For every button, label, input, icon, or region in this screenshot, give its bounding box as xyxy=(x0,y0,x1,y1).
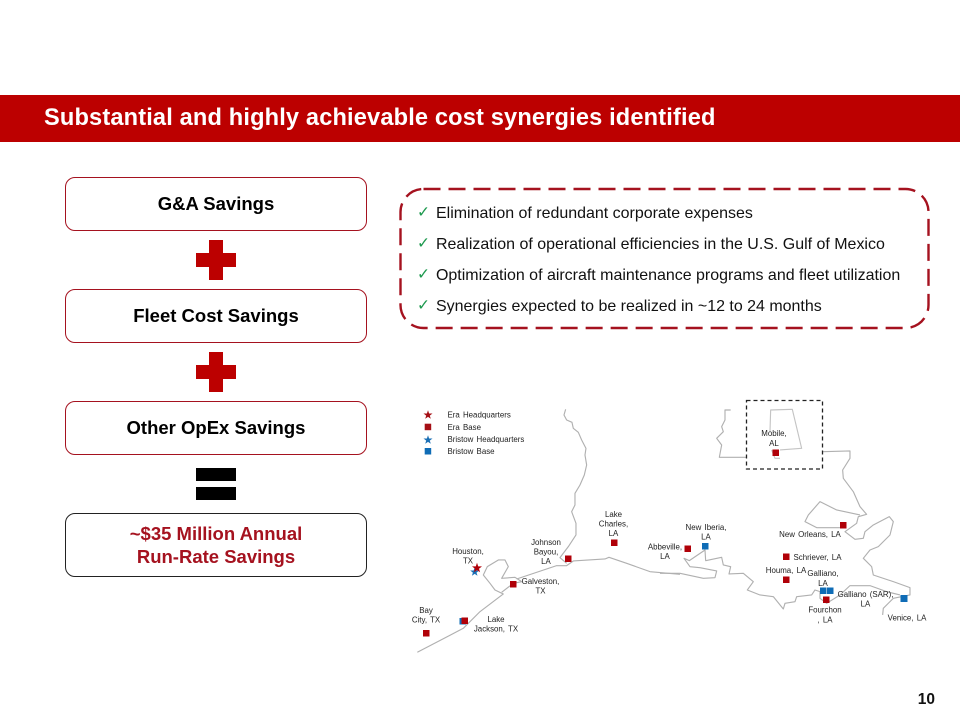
inset box: Mobile xyxy=(746,400,822,469)
map labels: AL xyxy=(769,439,779,448)
legend labels: Bristow Headquarters xyxy=(448,435,524,444)
box: G&A savings xyxy=(65,177,367,231)
item: timing: ✓ xyxy=(417,296,430,314)
box: other opex savings xyxy=(65,401,367,455)
list: synergy points xyxy=(417,203,900,315)
map labels: , LA xyxy=(817,616,833,624)
legend labels: Bristow Base xyxy=(448,447,495,456)
box: total run-rate savings: ~$35 Million Annual xyxy=(130,523,302,544)
map labels: Galveston, xyxy=(522,577,559,586)
legend labels: Era Base xyxy=(448,423,482,432)
map labels: Abbeville, xyxy=(648,542,682,552)
item: timing: Synergies expected to be realized in ~12 to 24 months xyxy=(436,298,822,315)
map labels: LA xyxy=(861,600,871,608)
map labels: LA xyxy=(541,557,552,566)
map labels: Lake xyxy=(487,615,505,624)
icon: plus sign 2 xyxy=(196,352,236,392)
box: fleet cost savings xyxy=(65,289,367,343)
legend marker: Era headquarters xyxy=(424,410,432,419)
item: redundant expenses: ✓ xyxy=(417,203,430,221)
map outlines east xyxy=(660,409,910,615)
map labels: Bayou, xyxy=(534,548,558,556)
item: maintenance optimization: Optimization of aircraft maintenance programs and fleet utilization xyxy=(436,267,900,284)
icon: plus sign 1 xyxy=(196,240,236,280)
map labels: Venice, LA xyxy=(888,614,927,622)
legend marker: Bristow base xyxy=(425,448,431,454)
item: operational efficiencies: ✓ xyxy=(417,234,430,252)
legend marker: Era base xyxy=(425,424,431,430)
map labels: Galliano (SAR), xyxy=(838,590,893,599)
map labels: Houston, xyxy=(452,547,484,556)
markers: Bristow bases xyxy=(460,543,908,624)
box: other opex savings: Other OpEx Savings xyxy=(127,417,305,438)
map labels: TX xyxy=(463,556,474,566)
markers: Era bases xyxy=(423,450,846,636)
map labels: LA xyxy=(660,552,671,561)
map labels: Jackson, TX xyxy=(474,624,519,634)
box: total run-rate savings: Run-Rate Savings xyxy=(137,546,295,567)
legend labels: Era Headquarters xyxy=(448,411,511,420)
map outlines west xyxy=(417,409,680,652)
box: total run-rate savings xyxy=(65,513,367,577)
legend marker: Bristow headquarters xyxy=(424,435,432,444)
map labels: Charles, xyxy=(599,520,628,528)
map labels: Houma, LA xyxy=(766,566,807,575)
map labels: Lake xyxy=(605,510,623,519)
map labels: New Iberia, xyxy=(686,523,726,532)
box: fleet cost savings: Fleet Cost Savings xyxy=(133,305,299,326)
map labels: Johnson xyxy=(531,538,561,547)
page number: 10 xyxy=(918,691,935,708)
map labels: LA xyxy=(818,579,829,588)
map labels xyxy=(412,429,927,634)
box: G&A savings: G&A Savings xyxy=(158,193,274,214)
map labels: City, TX xyxy=(412,616,441,624)
icon: equals sign xyxy=(196,468,236,500)
item: operational efficiencies: Realization of operational efficiencies in the U.S. Gulf of Mexico xyxy=(436,236,885,253)
map labels: LA xyxy=(609,529,619,538)
map labels: Galliano, xyxy=(807,569,839,578)
marker: Era headquarters xyxy=(472,563,482,572)
legend labels xyxy=(448,411,524,456)
map labels: Schriever, LA xyxy=(794,553,842,562)
item: redundant expenses: Elimination of redundant corporate expenses xyxy=(436,205,753,222)
map labels: Bay xyxy=(419,606,433,615)
map labels: Mobile, xyxy=(761,429,787,438)
title: Substantial and highly achievable cost synergies identified xyxy=(44,105,716,131)
title banner xyxy=(0,95,960,142)
map labels: New Orleans, LA xyxy=(779,530,842,539)
marker: Bristow headquarters xyxy=(470,567,479,576)
legend xyxy=(424,410,524,456)
map labels: LA xyxy=(701,532,712,542)
map labels: TX xyxy=(535,586,546,596)
item: maintenance optimization: ✓ xyxy=(417,265,430,283)
map labels: Fourchon xyxy=(808,606,842,614)
panel: synergy dashed outline xyxy=(399,188,930,330)
